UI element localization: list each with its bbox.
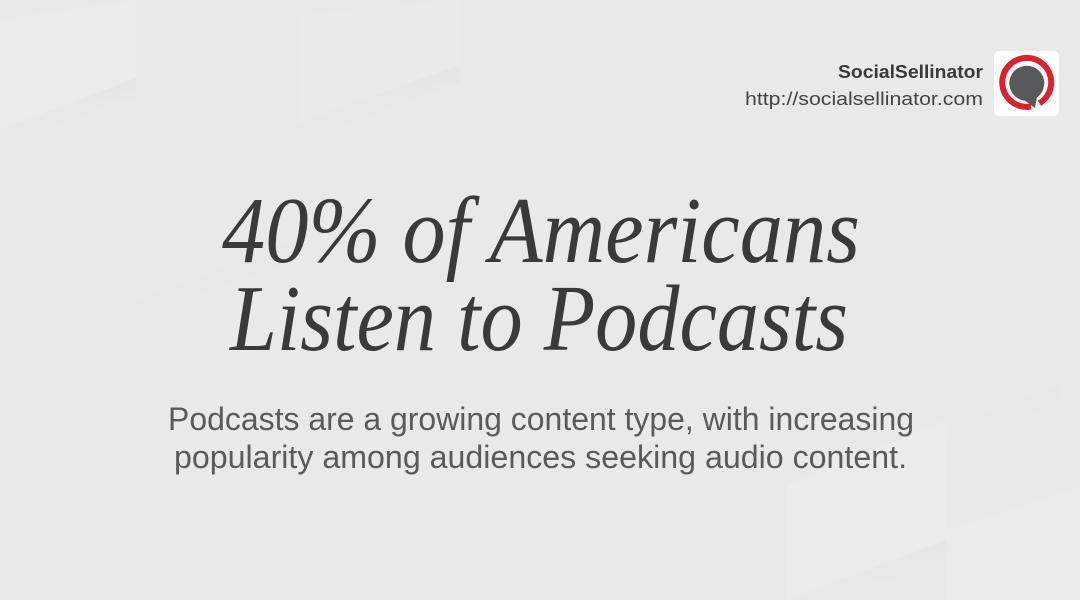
title [222,179,860,371]
subtitle text: popularity among audiences seeking audio content. [174,439,907,475]
brand name: SocialSellinator [838,62,983,82]
subtitle text [168,401,914,475]
brand url: http://socialsellinator.com [745,89,983,109]
icon: SocialSellinator logo [994,51,1059,116]
title: Listen to Podcasts [228,267,848,371]
title: 40% of Americans [222,179,860,283]
subtitle text: Podcasts are a growing content type, with increasing [168,401,914,437]
